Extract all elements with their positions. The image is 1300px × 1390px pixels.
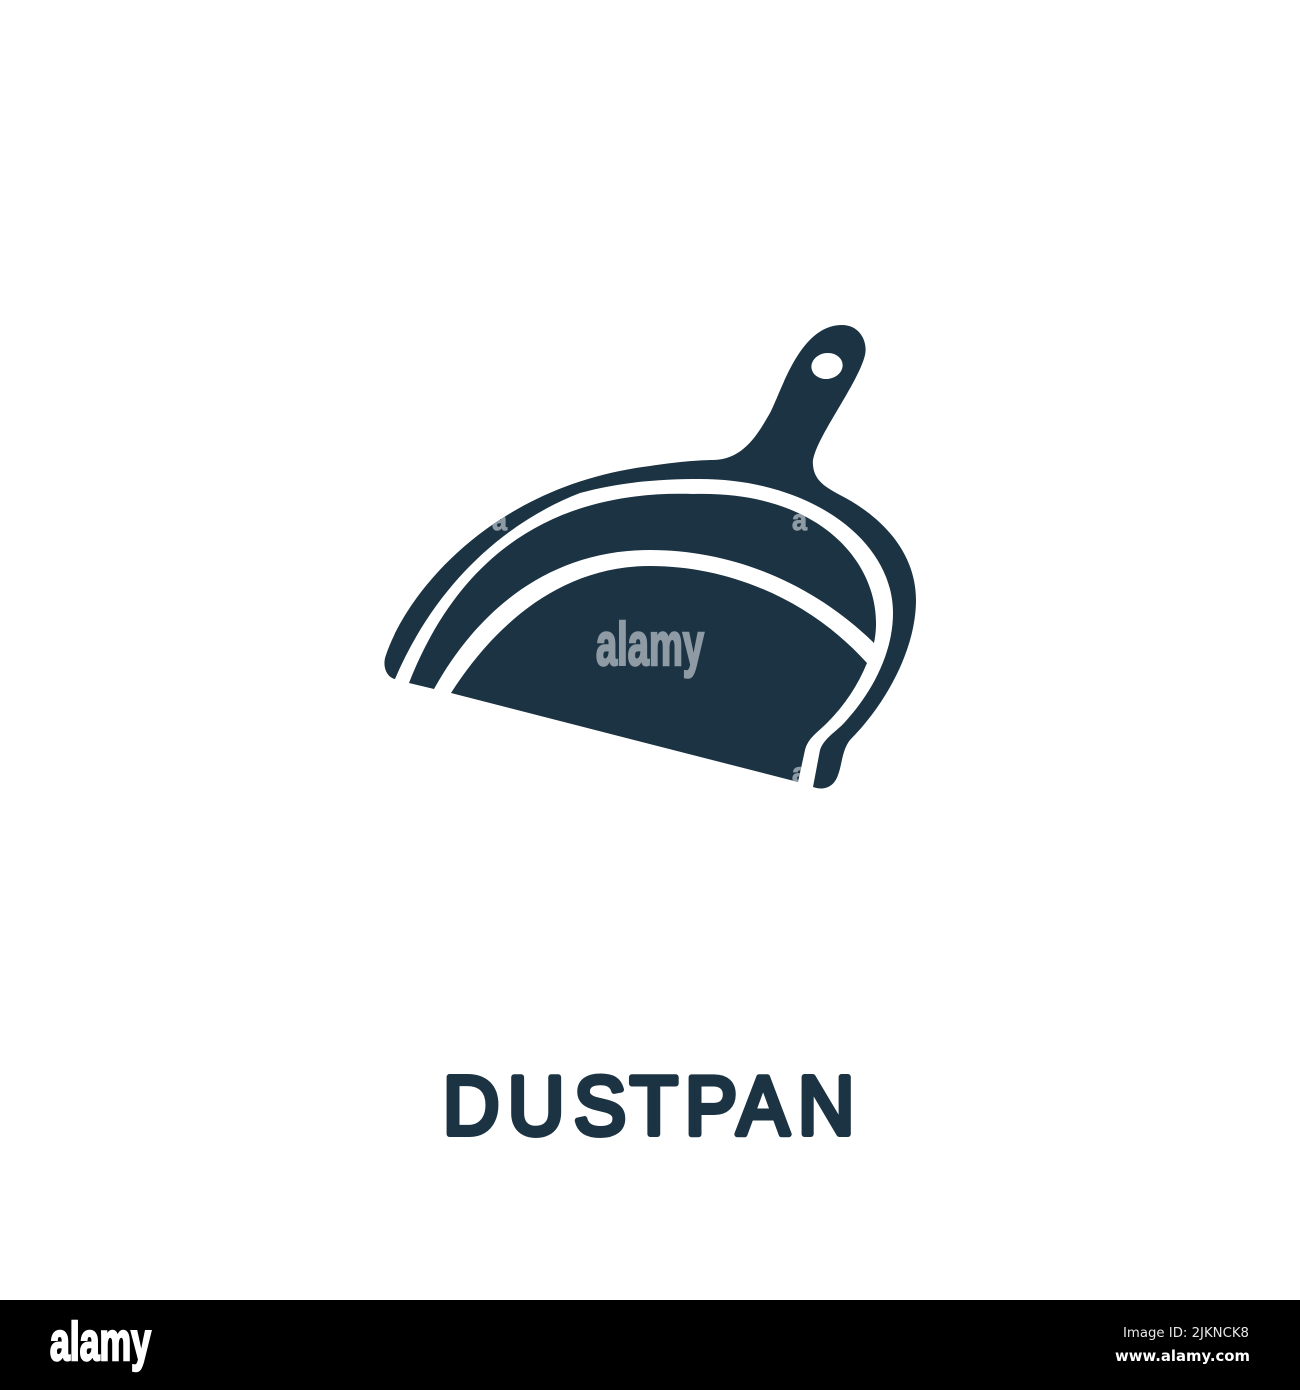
footer bar: [0, 1300, 1300, 1390]
dustpan middle band: [409, 494, 876, 689]
icon: dustpan: [384, 325, 916, 788]
small watermark fragments: a: [792, 757, 807, 790]
dustpan inner tray: [451, 566, 867, 782]
handle hole: [810, 351, 844, 381]
small watermark fragments: a: [492, 504, 507, 537]
infographic canvas: [0, 325, 1300, 1390]
footer logo: alamy: alamy: [50, 1312, 151, 1372]
title: DUSTPAN: DUSTPAN: [443, 1060, 854, 1153]
dustpan outer rim and handle: [384, 325, 916, 788]
watermark: alamy: alamy: [596, 611, 704, 678]
footer image id: Image ID: 2JKNCK8: [1123, 1325, 1249, 1341]
small watermark fragments: [492, 504, 807, 790]
footer website: www.alamy.com: [1115, 1347, 1250, 1365]
small watermark fragments: a: [792, 504, 807, 537]
